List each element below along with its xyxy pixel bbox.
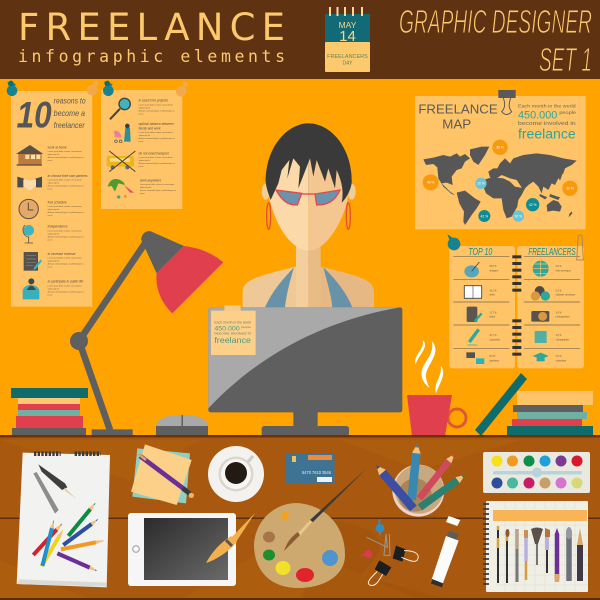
icon: people [23, 278, 39, 299]
text: transport [139, 151, 175, 168]
icon: handshake [17, 177, 42, 191]
panel: freelance map [415, 90, 586, 229]
text: anywhere: adipiscing elit. [140, 186, 152, 189]
notebook statistics: designer [489, 269, 498, 272]
map callouts: 40 % [427, 181, 434, 185]
statistic text: Each month in the world [518, 103, 576, 109]
panel: top 10 notebook [447, 234, 584, 368]
text: work at home: Lorem ipsum dolor sit amet, consectetuer [48, 150, 82, 153]
text: transport: do not need transport [139, 151, 169, 155]
pins and binder clips [361, 519, 418, 586]
text: free schedule: purus [48, 215, 52, 217]
sunglasses [276, 190, 340, 205]
icon: orange pin [87, 81, 99, 95]
map heading [418, 102, 498, 131]
tablet [128, 513, 236, 586]
sticky note: people [241, 325, 252, 329]
map callouts: 30 % [566, 187, 574, 191]
text: projects: in search for projects [139, 99, 168, 103]
text: work at home: work at home [48, 145, 67, 149]
statistic text: people [559, 110, 577, 115]
text: revenue: adipiscing elit. [48, 260, 60, 263]
coffee cup [208, 446, 264, 502]
text: projects: purus [139, 113, 143, 115]
text: transport: Lorem ipsum dolor sit amet, consectetuer [139, 156, 173, 159]
notebook headings: TOP 10 [468, 247, 493, 258]
notebook headings [468, 247, 576, 258]
pencils [32, 501, 104, 573]
map callouts: 30 % [496, 146, 504, 150]
sticky note: freelance [214, 335, 251, 345]
text: balance: family and work [139, 126, 161, 130]
text: transport: Aenean commodo ligula, in pellentesque eu [139, 162, 175, 165]
text: revenue: Lorem ipsum dolor sit amet, consectetuer [48, 257, 82, 260]
text: revenue [48, 252, 84, 269]
notebook statistics: 3,9 % [556, 312, 562, 314]
text: public life [48, 280, 84, 296]
map callouts: 20 % [515, 214, 522, 218]
neck [296, 243, 321, 307]
map callouts: 42 % [481, 214, 488, 218]
notebook statistics: web-developer [556, 269, 571, 272]
watercolour box [483, 452, 590, 493]
paper clips [367, 534, 390, 555]
text: balance: optimal balance between [139, 122, 174, 126]
subtitle: infographic elements [18, 47, 285, 66]
face [268, 150, 349, 251]
text: work at home [48, 145, 84, 162]
text: balance: adipiscing elit. [139, 134, 151, 137]
text: public life: purus [48, 294, 52, 296]
right book stack [475, 373, 593, 436]
notebook statistics: 12,7 % [489, 312, 497, 314]
blue pin [376, 519, 384, 535]
sticky note: become involved in [214, 332, 251, 336]
pencil holder [373, 443, 468, 517]
paint palette [254, 469, 366, 588]
spiral binding [512, 255, 521, 356]
icon: house [16, 145, 43, 166]
text: transport: purus [139, 166, 143, 168]
text: public life: adipiscing elit. [48, 287, 60, 290]
orange stylus brush [206, 513, 255, 563]
icon: teal pin [7, 81, 17, 96]
text: public life: Aenean commodo ligula, in pellentesque eu [48, 290, 84, 293]
notebook statistics: software developer [556, 294, 576, 297]
notebook statistics: 26,5 % [489, 266, 497, 268]
notebook statistics: 2,5 % [556, 356, 562, 358]
text: independence: purus [48, 239, 52, 241]
icon: mother and stroller [114, 124, 131, 143]
text: revenue: to increase revenue [48, 252, 76, 256]
text: balance: Lorem ipsum dolor sit amet, consectetuer [139, 131, 173, 134]
text: revenue: purus [48, 267, 52, 269]
text: partners: adipiscing elit. [48, 182, 60, 185]
icon: notebook and pen [24, 252, 42, 271]
dress straps [265, 267, 352, 307]
binder clip [368, 560, 391, 586]
icons right page [531, 261, 550, 361]
text: balance: Aenean commodo ligula, in pellentesque eu [139, 137, 175, 140]
text: work at home: Aenean commodo ligula, in pellentesque eu [48, 156, 84, 159]
sticky note: Each month in the world [214, 320, 251, 324]
woman at computer [208, 123, 402, 436]
calendar icon: MAY [339, 20, 357, 30]
ruler [493, 510, 587, 521]
poster heading: reasons to [54, 96, 86, 105]
icon: magnifier [110, 98, 130, 119]
text: partners: Aenean commodo ligula, in pellentesque eu [48, 185, 84, 188]
USB flash drive [431, 516, 460, 587]
brushes [498, 526, 583, 583]
notebook statistics: 10,7 % [489, 335, 497, 337]
statistic text: 450.000 [518, 109, 557, 121]
statistic text: freelance [518, 126, 576, 141]
map heading: FREELANCE [418, 102, 498, 117]
text: free schedule: Lorem ipsum dolor sit amet, consectetuer [48, 205, 82, 208]
icon: palm and parrot [108, 179, 134, 199]
notebook statistics: consultant [556, 359, 567, 362]
big number 10: 10 [17, 93, 52, 135]
notebook statistics: 5,3 % [556, 290, 562, 292]
sketchbook with pencils [17, 453, 110, 587]
map heading: MAP [442, 116, 471, 131]
grey marker [33, 472, 59, 514]
icon: clock [19, 199, 38, 219]
map callouts: 42 % [529, 203, 536, 207]
text: independence: Aenean commodo ligula, in pellentesque eu [48, 235, 84, 238]
notebook statistics: translator [489, 359, 499, 362]
world map [423, 147, 577, 225]
text: independence [48, 225, 84, 241]
text: free schedule: adipiscing elit. [48, 208, 60, 211]
shoulders [243, 267, 374, 307]
hair fringe [266, 123, 352, 203]
notebook statistics: photographer [556, 316, 570, 319]
notebook statistics: videographer [556, 338, 569, 341]
notebook statistics: 2,6 % [556, 335, 562, 337]
monitor [208, 307, 402, 436]
sticky note [211, 305, 256, 355]
text: work at home: adipiscing elit. [48, 153, 60, 156]
icons left page [464, 262, 484, 364]
credit card [285, 453, 334, 484]
statistic text [518, 103, 577, 141]
text: independence: adipiscing elit. [48, 232, 60, 235]
text: projects: Lorem ipsum dolor sit amet, consectetuer [139, 103, 173, 106]
text: independence: independence [48, 225, 68, 229]
text: partners: Lorem ipsum dolor sit amet, consectetuer [48, 179, 82, 182]
sticky note: 450.000 [214, 325, 240, 332]
notebook statistics: 5,6 % [556, 266, 562, 268]
computer mouse [156, 415, 208, 437]
header band [0, 0, 600, 79]
icon: orange pin [176, 82, 188, 97]
binder clip [393, 546, 418, 562]
text: free schedule [48, 200, 84, 217]
calendar icon [325, 7, 370, 72]
text: partners: purus [48, 189, 52, 191]
pen [38, 464, 77, 499]
poster heading: freelancer [54, 121, 85, 130]
sticky notes with pencil [131, 444, 194, 505]
text: anywhere: Aenean commodo ligula, in pellentesque eu [140, 189, 176, 192]
icon: globe [23, 225, 34, 243]
text: anywhere [140, 178, 176, 195]
text: work at home: purus [48, 160, 52, 162]
text: transport: adipiscing elit. [139, 159, 151, 162]
paper clip [577, 235, 583, 260]
red pin [361, 550, 372, 558]
text: projects: Aenean commodo ligula, in pellentesque eu [139, 109, 175, 112]
coffee mug with steam [407, 340, 466, 436]
set heading [399, 3, 592, 78]
text: projects [139, 99, 175, 115]
title: FREELANCE [18, 6, 285, 49]
text: public life: to participate in public life [48, 280, 83, 284]
icon: binder clip [498, 90, 516, 114]
notebook statistics: copywriter [489, 338, 500, 341]
calendar icon: DAY [343, 60, 353, 66]
desk lamp [70, 231, 223, 437]
text: anywhere: Lorem ipsum dolor sit amet, consectetuer [140, 183, 174, 186]
poster heading: become a [54, 109, 85, 118]
text: public life: Lorem ipsum dolor sit amet, consectetuer [48, 284, 82, 287]
poster heading [54, 96, 86, 130]
notebook statistics: 18,2 % [489, 290, 497, 292]
credit card: 5470 7610 3546 [302, 470, 331, 475]
notebook with brushes [483, 501, 588, 592]
text: free schedule: free schedule [48, 200, 67, 204]
calendar icon: 14 [339, 28, 356, 45]
wooden table [0, 435, 600, 600]
text: partners: to choose their own partners [48, 174, 88, 178]
panel: 10 reasons poster [7, 81, 99, 307]
hair back [266, 123, 352, 203]
notebook statistics: writer [489, 294, 495, 297]
icon: crossed bus [107, 151, 135, 172]
text: anywhere: work anywhere [140, 178, 161, 182]
text: anywhere: purus [140, 193, 145, 195]
notebook statistics: editor [489, 316, 495, 319]
notebook headings: FREELANCERS [528, 247, 576, 258]
paint brush [284, 469, 366, 551]
text: revenue: Aenean commodo ligula, in pellentesque eu [48, 263, 84, 266]
icon: teal pin [103, 81, 114, 96]
text: independence: Lorem ipsum dolor sit amet, consectetuer [48, 229, 82, 232]
text: free schedule: Aenean commodo ligula, in pellentesque eu [48, 211, 84, 214]
icon: teal pin [447, 234, 460, 250]
map callouts: 20 % [477, 182, 485, 186]
text: projects: adipiscing elit. [139, 106, 151, 109]
notebook statistics [489, 266, 576, 362]
text: balance: purus [139, 141, 143, 143]
left book stack [11, 388, 88, 437]
notebook statistics: 8,5 % [489, 356, 495, 358]
text: balance [139, 122, 175, 143]
text: partners [48, 174, 88, 191]
ears [262, 184, 356, 200]
map callouts [423, 140, 578, 222]
statistic text: become involved in [518, 121, 576, 127]
panel: reasons poster two [101, 81, 188, 209]
calendar icon: FREELANCERS [327, 54, 368, 60]
earrings [267, 203, 350, 229]
